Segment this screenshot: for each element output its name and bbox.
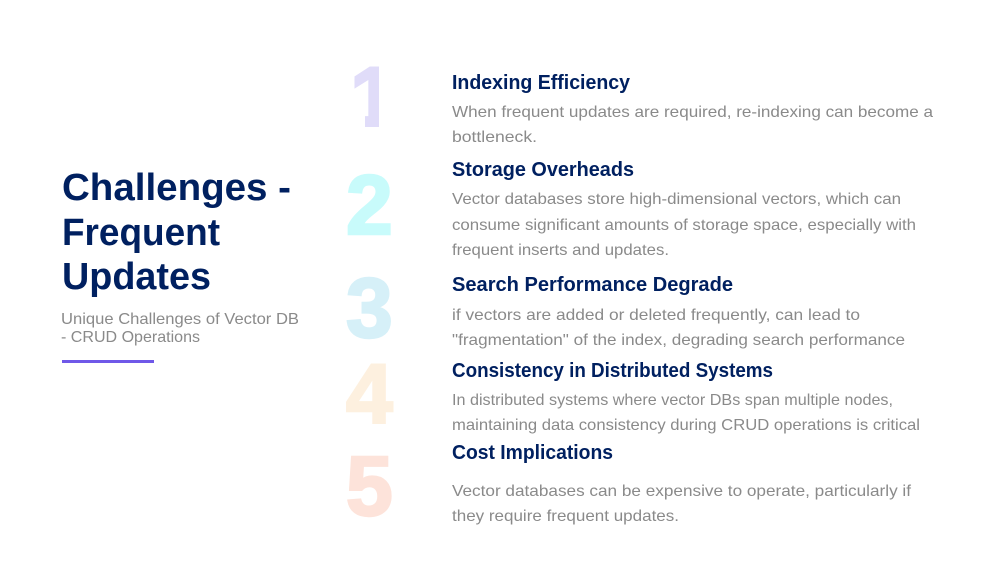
title [62,167,291,298]
number 4: 4 [346,347,393,441]
text: consistency description: maintaining data consistency during CRUD operations is critical [452,417,920,434]
title: Frequent [62,212,220,254]
text: search description: "fragmentation" of the index, degrading search performance [452,332,905,349]
text: search description [452,307,905,349]
heading: Consistency in Distributed Systems: Consistency in Distributed Systems [452,360,773,382]
panel: item 3 [346,261,905,355]
subtitle [61,311,299,346]
text: search description: if vectors are added or deleted frequently, can lead to [452,307,860,324]
text: storage description: Vector databases store high-dimensional vectors, which can [452,191,901,208]
text: storage description: consume significant amounts of storage space, especially with [452,217,916,234]
text: consistency description [452,392,920,434]
panel: item 5 [346,439,912,533]
accent underline [62,360,154,363]
text: cost description: Vector databases can be expensive to operate, particularly if [452,483,912,500]
text: cost description [452,483,912,525]
panel: item 2 [346,158,916,259]
heading: Cost Implications: Cost Implications [452,442,613,464]
text: cost description: they require frequent updates. [452,508,679,525]
number 1: 1 [350,50,397,144]
title: Challenges - [62,167,291,209]
title: Updates [62,256,211,298]
number 2: 2 [346,158,393,252]
panel: item 1 [354,66,933,142]
text: storage description [452,191,916,259]
text: storage description: frequent inserts and updates. [452,242,669,259]
text: indexing description: When frequent updates are required, re-indexing can become a [452,104,933,121]
subtitle: Unique Challenges of Vector DB [61,311,299,328]
number 3: 3 [346,261,393,355]
heading: Indexing Efficiency: Indexing Efficiency [452,72,631,94]
panel: title block [61,167,299,363]
text: indexing description [452,104,933,146]
heading: Storage Overheads: Storage Overheads [452,159,634,181]
heading: Search Performance Degrade: Search Performance Degrade [452,274,733,296]
text: consistency description: In distributed systems where vector DBs span multiple nodes, [452,392,893,409]
subtitle: - CRUD Operations [61,329,200,346]
panel: item 4 [346,347,920,441]
number 5: 5 [346,439,393,533]
text: indexing description: bottleneck. [452,129,537,146]
